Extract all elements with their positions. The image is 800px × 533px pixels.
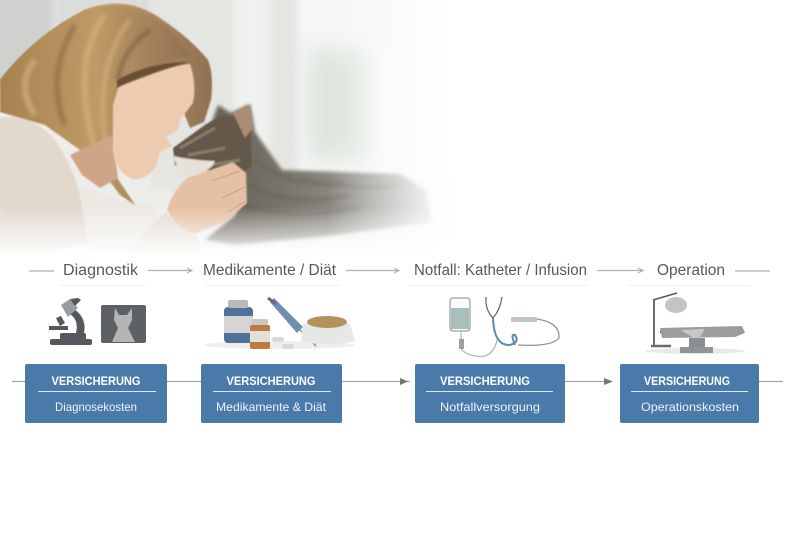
photo: cat body <box>180 104 432 245</box>
step headings: Medikamente / Diät <box>203 262 337 279</box>
panel: Operationskosten <box>620 364 759 423</box>
icon: medicine bottles, syringe and food bowl <box>205 298 355 349</box>
bowl <box>301 320 355 344</box>
photo: woman cuddling cat <box>0 0 431 250</box>
photo: hair streaks <box>25 15 150 150</box>
large bottle <box>224 307 253 343</box>
panel: Operationskosten: VERSICHERUNG <box>644 376 730 388</box>
icon: infusion bag, stethoscope and catheter <box>450 297 559 356</box>
syringe <box>270 298 303 333</box>
step headings: Diagnostik <box>63 262 139 279</box>
stethoscope <box>486 297 502 318</box>
photo: woman sweater <box>0 116 87 244</box>
panel: Operationskosten: Operationskosten <box>641 400 739 414</box>
photo: cat head <box>173 105 253 178</box>
step headings: Notfall: Katheter / Infusion <box>414 262 587 279</box>
panel: Diagnosekosten <box>25 364 167 423</box>
icon: operating table with lamp <box>645 293 745 354</box>
panel: Medikamente & Diät: Medikamente & Diät <box>216 400 327 414</box>
infusion bag <box>450 298 470 331</box>
panel: Diagnosekosten: VERSICHERUNG <box>52 376 141 388</box>
photo: woman neck and face <box>70 135 118 188</box>
pills <box>272 337 284 342</box>
icon: cat x-ray <box>101 305 146 343</box>
photo: hair left mass <box>0 6 190 205</box>
heading connector arrows <box>29 268 770 273</box>
panel: Diagnosekosten: Diagnosekosten <box>55 400 137 414</box>
photo: hand <box>167 162 247 234</box>
small bottle <box>250 325 270 349</box>
timeline arrows <box>12 378 783 385</box>
panel: Notfallversorgung: Notfallversorgung <box>440 400 540 414</box>
catheter line <box>518 319 559 345</box>
photo background: room and curtain <box>0 0 378 237</box>
step headings <box>63 262 725 279</box>
panel: Notfallversorgung: VERSICHERUNG <box>440 376 530 388</box>
step headings: Operation <box>657 262 725 279</box>
panel: Notfallversorgung <box>415 364 565 423</box>
panel: Medikamente & Diät <box>201 364 342 423</box>
panel: Medikamente & Diät: VERSICHERUNG <box>226 376 316 388</box>
photo: hair back and right side <box>0 4 212 128</box>
icon: microscope <box>49 298 92 345</box>
ground shadow <box>205 341 355 349</box>
